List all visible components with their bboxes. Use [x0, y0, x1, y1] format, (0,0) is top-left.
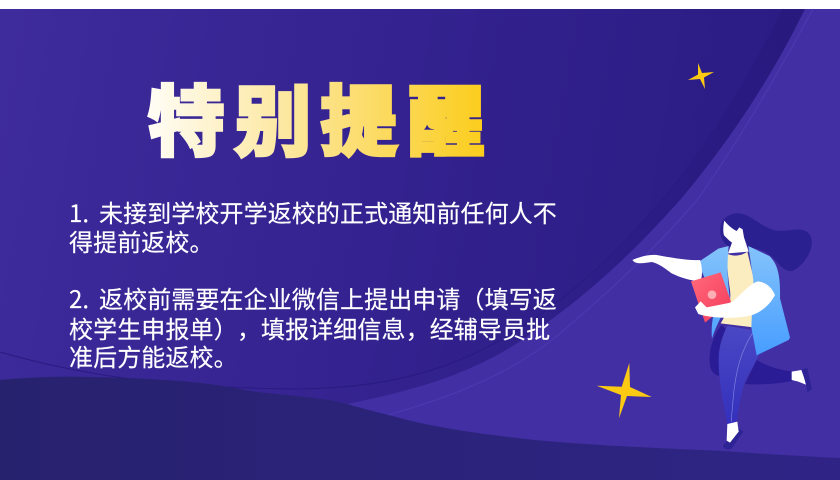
face and neck	[723, 221, 749, 253]
book emblem	[708, 290, 716, 299]
text block: reminder 2: 2.	[69, 280, 89, 315]
front shoe sole	[723, 428, 743, 449]
title	[148, 61, 484, 171]
background: bottom hill	[0, 377, 840, 480]
jacket	[699, 246, 790, 355]
text block: reminder 1: 得提前返校。	[69, 223, 214, 258]
background: faint light arc line	[388, 9, 813, 415]
title: 特	[148, 61, 224, 171]
front leg	[719, 326, 759, 424]
back leg	[710, 325, 793, 384]
text block: reminder 2: 准后方能返校。	[69, 338, 238, 373]
text block: reminder 2: 校学生申报单）	[69, 310, 238, 345]
title: 醒	[408, 61, 484, 171]
text block: reminder 2	[69, 280, 557, 373]
text block: reminder 1: 1.	[69, 194, 89, 229]
hair	[720, 213, 812, 271]
book	[691, 272, 731, 323]
text block: reminder 2: 填报详细信息，经辅导员批	[261, 310, 550, 345]
holding arm	[695, 281, 775, 318]
title: 别	[235, 61, 311, 171]
text block: reminder 1: 未接到学校开学返校的正式通知前任何人不	[99, 194, 557, 229]
text block: reminder 2: 返校前需要在企业微信上提出申请（填写返	[99, 280, 557, 315]
background: thin dark arc line	[0, 9, 783, 389]
trouser seam	[731, 333, 752, 422]
back shoe sole	[802, 368, 812, 392]
front shoe	[727, 422, 739, 443]
back shoe	[792, 370, 807, 385]
text block: reminder 2: ，	[237, 310, 261, 345]
reaching arm	[632, 255, 702, 281]
text block: reminder 1	[69, 194, 557, 258]
icon: large yellow star	[597, 363, 652, 418]
illustration: woman running with a book	[632, 213, 812, 449]
title: 提	[321, 61, 397, 171]
icon: small yellow star	[688, 63, 714, 89]
shirt	[721, 252, 754, 327]
background: main gradient arc panel	[0, 9, 783, 389]
